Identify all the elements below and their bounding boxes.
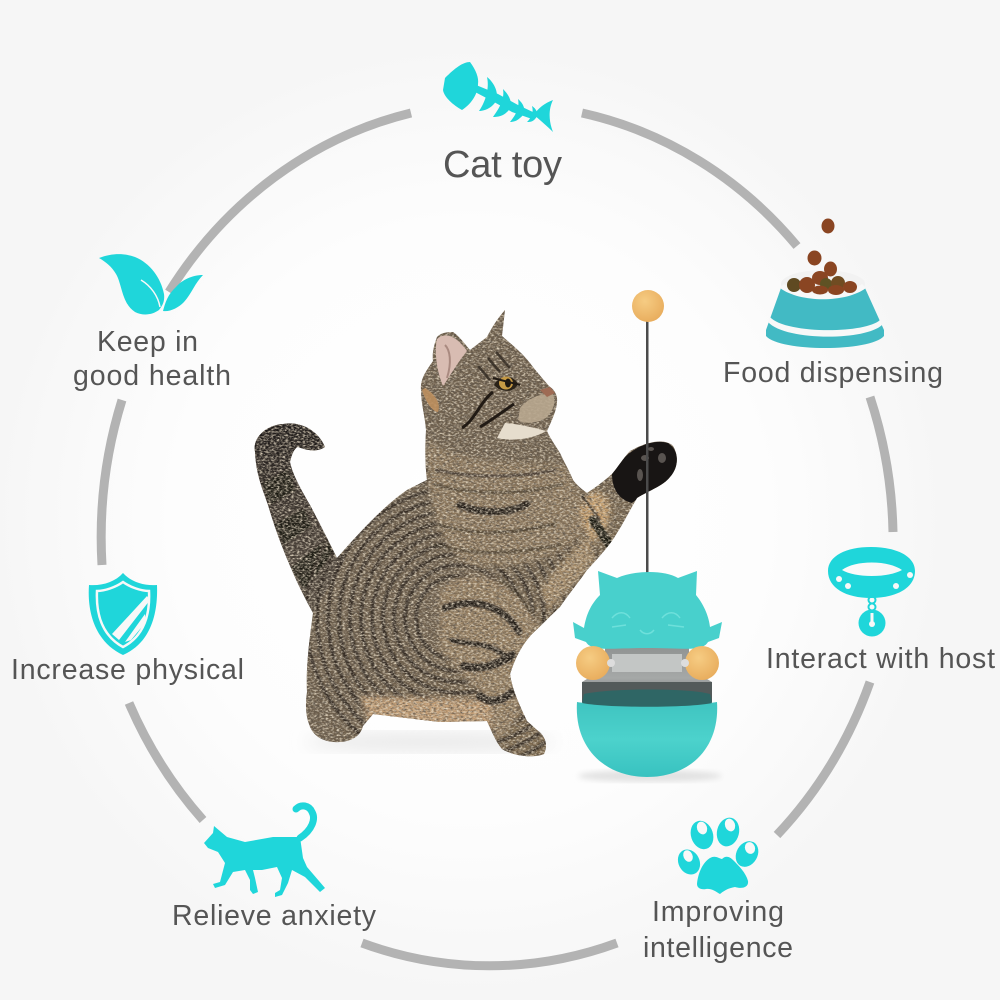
forehead dark markings [478,352,510,380]
cat ground shadow [305,732,555,752]
icon: collar [828,547,915,636]
label: Relieve anxiety: Relieve anxiety [172,900,377,932]
eye [494,377,518,391]
fur texture [254,311,677,756]
chest and leg dark bands [436,470,610,701]
bowl body [766,288,884,348]
light chest, shoulder, belly and leg patches [360,440,610,740]
icon: fish bone [443,62,553,132]
toy upper dome with ears [573,571,722,649]
icon: paw [674,815,763,894]
toy cat face [612,613,684,634]
flank stripes [306,466,610,770]
heading: Cat toy: Cat toy [443,144,562,186]
photo: tabby cat [254,310,677,756]
toy lower ball [577,702,717,777]
ear pink [436,335,467,386]
label: Improving intelligence [643,896,793,964]
bowl rim [781,270,865,298]
label: Keep in good health [73,326,231,392]
icon: food bowl [766,218,884,348]
paw black pads [612,442,677,503]
label: Food dispensing: Food dispensing [723,357,943,389]
cat tail [255,423,345,613]
icon: leaves [99,254,203,314]
toy: tumbler with wand [573,290,722,777]
wand ball [632,290,664,322]
kibble [787,218,857,295]
label: Improving intelligence: intelligence [643,932,793,964]
toy orange side balls [576,646,610,680]
cheek stripes [462,378,520,428]
toy shadow [578,770,722,782]
wand stem [646,318,648,574]
icon: shield [89,573,157,655]
label: Keep in good health: good health [73,360,231,392]
label: Improving intelligence: Improving [652,896,784,928]
muzzle [518,393,554,423]
toy glass middle [582,642,712,702]
label: Keep in good health: Keep in [97,326,198,358]
cat head details [422,335,555,440]
label: Interact with host: Interact with host [766,643,995,675]
label: Increase physical: Increase physical [11,654,244,686]
icon: walking cat [204,806,325,897]
circular arc ring [101,113,893,966]
